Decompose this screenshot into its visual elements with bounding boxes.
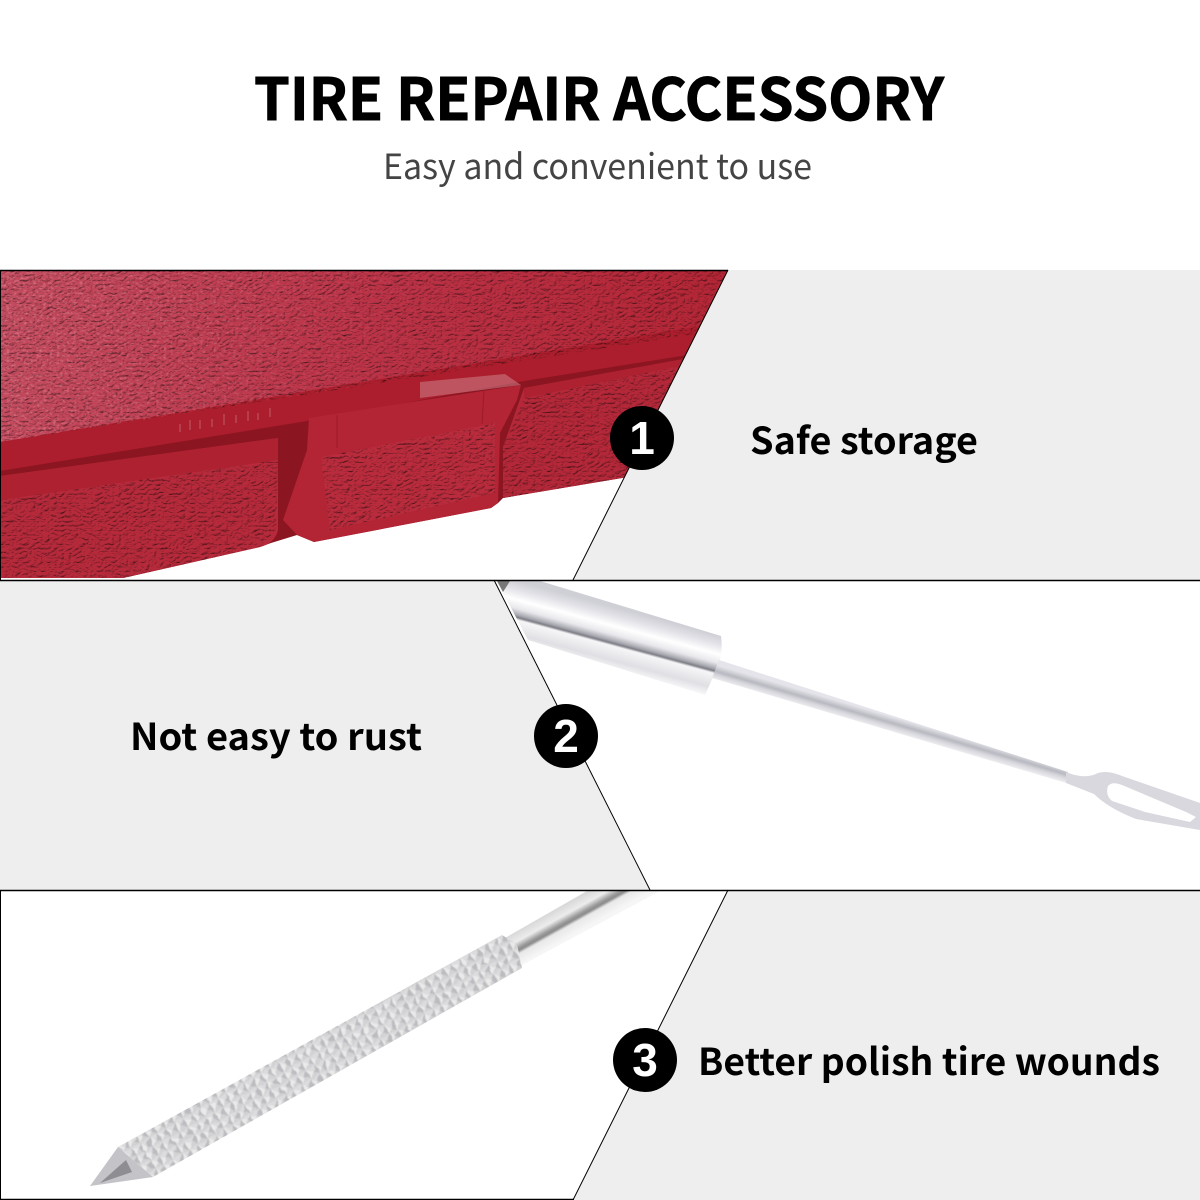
number badge 3	[613, 1028, 677, 1092]
number badge 1	[610, 406, 674, 470]
number badge 2: 2	[553, 710, 579, 762]
subtitle: Easy and convenient to use	[383, 139, 812, 190]
number badge 2	[534, 704, 598, 768]
label: safe storage: Safe storage	[750, 411, 978, 465]
panel background: grey	[0, 890, 1200, 1200]
title: TIRE REPAIR ACCESSORY	[254, 53, 945, 137]
number badge 1: 1	[629, 412, 655, 464]
photo: threading needle	[497, 581, 1200, 830]
photo frame left edges	[0, 270, 2, 1200]
photo: red storage case	[0, 270, 740, 580]
grey text area	[0, 580, 650, 890]
panel: not easy to rust	[0, 580, 1200, 890]
panel: safe storage	[0, 270, 1200, 580]
panel background: white	[0, 580, 1200, 890]
photo: knurled reamer	[0, 890, 728, 1200]
panel background: grey	[0, 270, 1200, 580]
horizontal divider lines	[0, 270, 1200, 1200]
label: not easy to rust: Not easy to rust	[130, 707, 422, 761]
number badge 3: 3	[632, 1034, 658, 1086]
panel: better polish tire wounds	[0, 890, 1200, 1200]
label: better polish tire wounds: Better polish tire wounds	[698, 1032, 1160, 1086]
